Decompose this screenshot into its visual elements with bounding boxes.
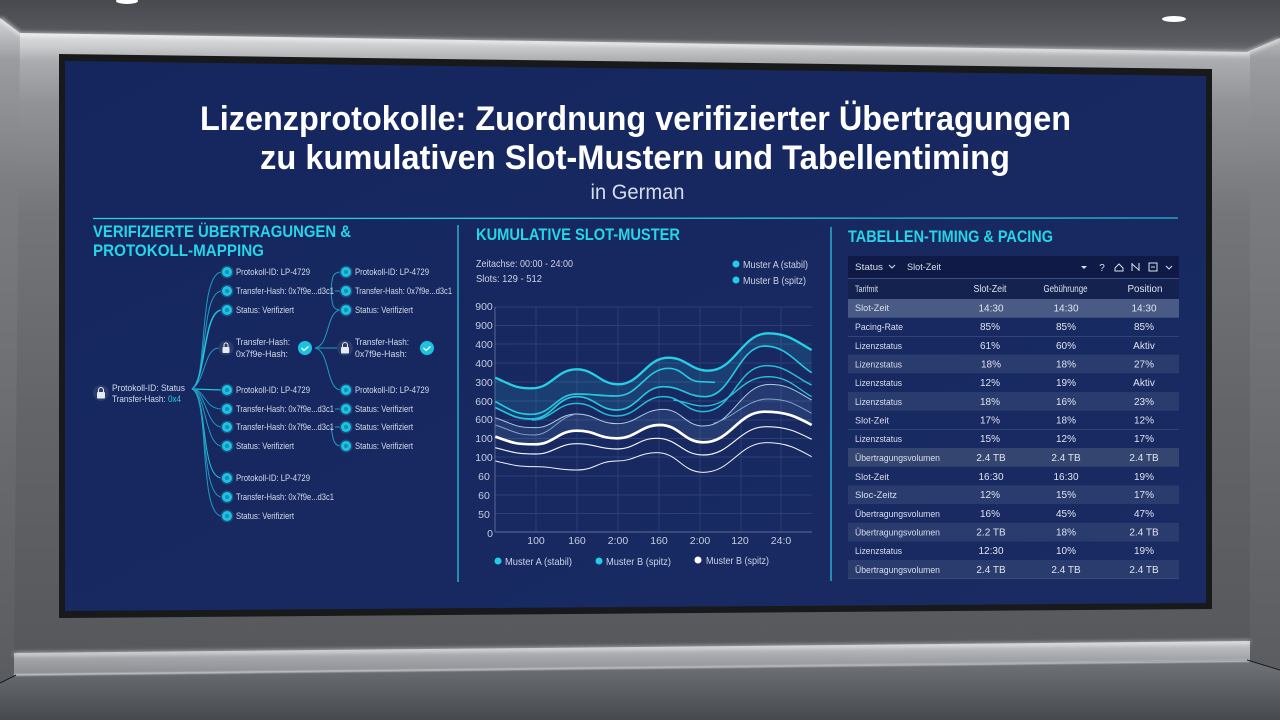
tree connectors bbox=[192, 272, 341, 516]
node column two: Status: Verifiziert bbox=[355, 305, 413, 316]
title bbox=[200, 100, 1071, 204]
horizontal rule below title bbox=[93, 217, 1178, 220]
table rows: 85% bbox=[1134, 322, 1154, 333]
table rows: 61% bbox=[980, 341, 1000, 352]
table rows: 19% bbox=[1134, 546, 1154, 557]
y axis labels: 0 bbox=[487, 528, 493, 540]
floor seam right bbox=[1247, 660, 1280, 670]
floor bbox=[0, 660, 1280, 720]
node column two: Protokoll-ID: LP-4729 bbox=[355, 267, 429, 278]
table rows: Sloc-Zeitz bbox=[855, 490, 897, 501]
cyan line two bbox=[495, 368, 715, 414]
table rows: 60% bbox=[1056, 341, 1076, 352]
chart meta text bbox=[476, 258, 573, 285]
table rows: 17% bbox=[980, 416, 1000, 426]
table rows: 12% bbox=[980, 378, 1000, 389]
table rows: Slot-Zeit bbox=[855, 416, 889, 426]
white thick line bbox=[495, 412, 812, 444]
table rows: 2.2 TB bbox=[976, 528, 1006, 538]
table rows: 17% bbox=[1134, 490, 1154, 501]
table rows: Übertragungsvolumen bbox=[855, 565, 940, 576]
node column two: Status: Verifiziert bbox=[355, 404, 413, 415]
node column one: Status: Verifiziert bbox=[236, 511, 294, 522]
node column one: Protokoll-ID: LP-4729 bbox=[236, 473, 310, 484]
screen frame bbox=[59, 54, 1212, 618]
node column one: Protokoll-ID: LP-4729 bbox=[236, 385, 310, 396]
table rows: 15% bbox=[1056, 490, 1076, 501]
node column two bbox=[340, 266, 452, 452]
table rows: 17% bbox=[1134, 434, 1154, 445]
root node bbox=[93, 383, 185, 405]
right corner glow bbox=[1249, 640, 1251, 660]
table header row: Tarifmit bbox=[855, 284, 878, 295]
table rows: Lizenzstatus bbox=[855, 378, 902, 389]
table header row: Gebührunge bbox=[1044, 284, 1088, 295]
white thin line bbox=[495, 427, 812, 455]
chart legend bottom bbox=[494, 555, 769, 568]
pale line seven bbox=[495, 399, 812, 435]
table rows: 2.4 TB bbox=[1051, 453, 1081, 464]
table rows: 2.4 TB bbox=[1051, 565, 1081, 576]
y axis labels: 400 bbox=[475, 358, 493, 370]
x axis labels: 2:00 bbox=[608, 535, 628, 547]
chart meta text: Zeitachse: 00:00 - 24:00 bbox=[476, 258, 573, 270]
table rows: 2.4 TB bbox=[1129, 453, 1159, 464]
floor seam left bbox=[0, 675, 16, 683]
y axis labels: 50 bbox=[478, 509, 490, 521]
x axis labels: 2:00 bbox=[690, 535, 710, 547]
title: in German bbox=[590, 181, 684, 204]
y axis labels: 600 bbox=[475, 396, 493, 408]
table rows: 16:30 bbox=[978, 472, 1004, 483]
heading: verified transfers: PROTOKOLL-MAPPING bbox=[93, 241, 264, 260]
table rows: Übertragungsvolumen bbox=[855, 453, 940, 464]
table rows: 14:30 bbox=[1053, 304, 1079, 314]
y axis labels: 400 bbox=[475, 339, 493, 351]
x axis labels: 24:0 bbox=[771, 535, 791, 547]
table rows: 16:30 bbox=[1053, 472, 1079, 483]
baseboard bbox=[14, 641, 1250, 675]
node column one: Protokoll-ID: LP-4729 bbox=[236, 267, 310, 278]
table rows: Slot-Zeit bbox=[855, 472, 889, 483]
cyan band fill bbox=[495, 333, 812, 419]
table rows: 16% bbox=[1056, 397, 1076, 408]
table rows: Übertragungsvolumen bbox=[855, 509, 940, 520]
right side wall bbox=[1250, 38, 1280, 670]
table rows: 19% bbox=[1056, 378, 1076, 389]
table rows: 19% bbox=[1134, 472, 1154, 483]
node column two: Transfer-Hash: 0x7f9e...d3c1 bbox=[355, 286, 452, 297]
y axis labels bbox=[475, 301, 493, 540]
table rows: 45% bbox=[1056, 509, 1076, 520]
table rows: Aktiv bbox=[1133, 341, 1155, 352]
table rows: 18% bbox=[980, 397, 1000, 408]
heading: verified transfers: VERIFIZIERTE ÜBERTRAGUNGEN & bbox=[93, 222, 351, 241]
table rows: 18% bbox=[1056, 360, 1076, 370]
left side wall bbox=[0, 18, 20, 683]
node column two: Status: Verifiziert bbox=[355, 422, 413, 433]
chart legend top: Muster A (stabil) bbox=[743, 259, 808, 271]
column divider left bbox=[457, 225, 459, 582]
column divider right bbox=[830, 227, 832, 581]
chart legend bottom: Muster A (stabil) bbox=[505, 556, 572, 568]
white thin line lower bbox=[495, 443, 812, 472]
left corner glow bbox=[13, 650, 15, 675]
node column one: Transfer-Hash: 0x7f9e...d3c1 bbox=[236, 404, 334, 415]
verified transfer lock one: Transfer-Hash: bbox=[236, 337, 290, 348]
table rows: Slot-Zeit bbox=[855, 303, 889, 314]
cyan line three bbox=[495, 346, 812, 419]
heading: verified transfers bbox=[93, 222, 351, 260]
table rows: 85% bbox=[1056, 322, 1076, 333]
table rows: 18% bbox=[1056, 416, 1076, 426]
table rows: 2.4 TB bbox=[1129, 528, 1159, 538]
chart meta text: Slots: 129 - 512 bbox=[476, 273, 542, 285]
table rows: 12% bbox=[1056, 434, 1076, 445]
baseboard top glow bbox=[14, 642, 1250, 654]
chart legend top: Muster B (spitz) bbox=[743, 275, 806, 287]
cyan line four bbox=[532, 366, 812, 420]
node column one: Status: Verifiziert bbox=[236, 305, 294, 316]
table rows: Aktiv bbox=[1133, 378, 1155, 389]
node column one bbox=[220, 266, 334, 522]
table rows: 16% bbox=[980, 509, 1000, 520]
table rows: 10% bbox=[1056, 546, 1076, 557]
table rows: 23% bbox=[1134, 397, 1154, 408]
table rows: Lizenzstatus bbox=[855, 360, 902, 370]
cyan thick line bbox=[495, 333, 812, 388]
table rows: Lizenzstatus bbox=[855, 341, 902, 352]
baseboard bottom glow bbox=[14, 661, 1250, 675]
x axis labels: 120 bbox=[731, 535, 749, 547]
heading: table timing and pacing: TABELLEN-TIMING & PACING bbox=[848, 227, 1053, 246]
table rows: 18% bbox=[981, 360, 1001, 370]
table rows bbox=[855, 303, 1159, 576]
table rows: 18% bbox=[1056, 528, 1076, 538]
table header row: Position bbox=[1128, 284, 1162, 295]
node column two: Status: Verifiziert bbox=[355, 441, 413, 452]
y axis labels: 900 bbox=[475, 320, 493, 332]
y axis labels: 100 bbox=[475, 433, 493, 445]
ceiling light strip bbox=[0, 18, 1280, 53]
x axis labels bbox=[527, 535, 791, 547]
node column one: Status: Verifiziert bbox=[236, 441, 294, 452]
x axis labels: 160 bbox=[568, 535, 586, 547]
heading: cumulative slot patterns: KUMULATIVE SLOT-MUSTER bbox=[476, 225, 680, 244]
panel: table timing and pacing bbox=[848, 227, 1179, 579]
table rows: 14:30 bbox=[1131, 304, 1157, 314]
table rows: 2.4 TB bbox=[1129, 565, 1159, 576]
ceiling bbox=[0, 0, 1280, 52]
table rows: Lizenzstatus bbox=[855, 546, 902, 557]
table rows: 47% bbox=[1134, 509, 1154, 520]
x axis labels: 100 bbox=[527, 535, 545, 547]
root node: Transfer-Hash: 0x4 bbox=[112, 394, 181, 405]
line chart bbox=[475, 301, 812, 547]
chart legend top bbox=[732, 259, 808, 287]
ceiling light right bbox=[1162, 16, 1186, 22]
table rows: 27% bbox=[1134, 360, 1154, 370]
y axis labels: 60 bbox=[478, 490, 490, 502]
table toolbar: Slot-Zeit bbox=[907, 262, 941, 273]
screen background bbox=[65, 61, 1206, 611]
table rows: Pacing-Rate bbox=[855, 322, 903, 333]
table rows: 85% bbox=[980, 322, 1000, 333]
table toolbar: ? bbox=[1099, 263, 1105, 274]
table row backgrounds bbox=[848, 299, 1179, 579]
table header row: Slot-Zeit bbox=[974, 284, 1007, 295]
table toolbar bbox=[848, 256, 1179, 278]
node column one: Transfer-Hash: 0x7f9e...d3c1 bbox=[236, 422, 334, 433]
table header row bbox=[848, 278, 1179, 299]
root node: Protokoll-ID: Status bbox=[112, 383, 185, 394]
ceiling light left bbox=[116, 0, 138, 4]
node column two: Protokoll-ID: LP-4729 bbox=[355, 385, 429, 396]
y axis labels: 100 bbox=[475, 452, 493, 464]
verified transfer lock two: Transfer-Hash: bbox=[355, 337, 409, 348]
node column one: Transfer-Hash: 0x7f9e...d3c1 bbox=[236, 286, 334, 297]
data curves bbox=[495, 333, 812, 472]
table rows: 12:30 bbox=[978, 546, 1004, 557]
title: zu kumulativen Slot-Mustern und Tabellentiming bbox=[260, 139, 1010, 177]
chart legend bottom: Muster B (spitz) bbox=[706, 555, 769, 567]
y axis labels: 600 bbox=[475, 414, 493, 426]
title: Lizenzprotokolle: Zuordnung verifizierter Übertragungen bbox=[200, 100, 1071, 138]
pale line six bbox=[495, 384, 812, 428]
table rows: 2.4 TB bbox=[976, 453, 1006, 464]
verified transfer lock one: 0x7f9e-Hash: bbox=[236, 349, 288, 360]
table rows: 12% bbox=[980, 490, 1000, 501]
pale band fill bbox=[495, 384, 812, 444]
cyan line five bbox=[673, 377, 812, 406]
table rows: Lizenzstatus bbox=[855, 434, 902, 445]
node column one: Transfer-Hash: 0x7f9e...d3c1 bbox=[236, 492, 334, 503]
verified transfer lock one bbox=[218, 337, 312, 360]
verified transfer lock two: 0x7f9e-Hash: bbox=[355, 349, 407, 360]
table rows: 15% bbox=[980, 434, 1000, 445]
y axis labels: 60 bbox=[478, 471, 490, 483]
x axis labels: 160 bbox=[650, 535, 668, 547]
table toolbar: Status bbox=[855, 262, 883, 273]
table rows: Übertragungsvolumen bbox=[855, 528, 940, 538]
chart grid bbox=[495, 307, 812, 532]
table rows: Lizenzstatus bbox=[855, 397, 902, 408]
table rows: 2.4 TB bbox=[976, 565, 1006, 576]
y axis labels: 300 bbox=[475, 377, 493, 389]
verified transfer lock two bbox=[337, 337, 434, 360]
y axis labels: 900 bbox=[475, 301, 493, 313]
table rows: 12% bbox=[1134, 416, 1154, 426]
table rows: 14:30 bbox=[978, 304, 1004, 314]
panel: verified transfers and protocol mapping bbox=[93, 222, 452, 522]
chart legend bottom: Muster B (spitz) bbox=[606, 556, 671, 568]
panel: cumulative slot patterns bbox=[475, 225, 812, 568]
